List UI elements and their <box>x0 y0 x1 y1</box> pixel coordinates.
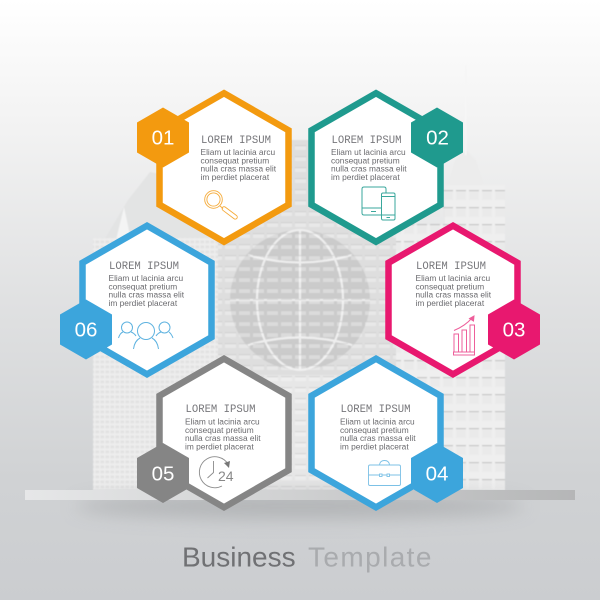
text 06: im perdiet placerat <box>108 298 178 308</box>
number 05: 05 <box>152 462 174 486</box>
heading 04: LOREM IPSUM <box>340 404 410 416</box>
number 01: 01 <box>152 126 174 150</box>
left spire <box>116 207 131 240</box>
icon: people <box>118 322 173 349</box>
hexagon 01 <box>160 93 288 242</box>
icon: briefcase <box>368 460 400 486</box>
number 03: 03 <box>503 318 525 342</box>
badge 02 <box>411 108 463 168</box>
city skyline <box>93 65 505 490</box>
icon: magnifier <box>205 191 238 220</box>
text 06: consequat pretium <box>108 281 177 291</box>
number 02: 02 <box>426 126 449 150</box>
text 02: consequat pretium <box>331 155 400 165</box>
icon: growth chart <box>454 316 474 355</box>
central tower windows <box>218 140 396 490</box>
text 05: Eliam ut lacinia arcu <box>185 416 260 426</box>
badge 04 <box>411 443 463 503</box>
text 01: Eliam ut lacinia arcu <box>200 147 276 157</box>
hexagon 06 <box>82 226 212 374</box>
globe <box>230 230 370 370</box>
title: Template <box>308 542 433 572</box>
text 04: im perdiet placerat <box>340 441 409 451</box>
platform <box>25 490 575 500</box>
text 03: Eliam ut lacinia arcu <box>416 273 491 283</box>
lower tower block <box>218 375 396 490</box>
text 05: nulla cras massa elit <box>185 433 261 443</box>
text 01: consequat pretium <box>200 155 269 165</box>
heading 06: LOREM IPSUM <box>109 261 179 273</box>
text 05: consequat pretium <box>185 425 254 435</box>
heading 05: LOREM IPSUM <box>186 404 255 416</box>
text 03: nulla cras massa elit <box>416 290 492 300</box>
badge 05 <box>137 443 189 503</box>
panel 04 <box>312 359 463 507</box>
icon: 24-hour clock <box>199 457 234 488</box>
number 06: 06 <box>75 318 97 342</box>
heading 03: LOREM IPSUM <box>416 261 486 273</box>
heading 02: LOREM IPSUM <box>332 135 401 147</box>
text 04: consequat pretium <box>340 425 409 435</box>
panel 02 <box>312 93 463 242</box>
badge 01 <box>137 108 189 168</box>
platform shadow <box>75 493 525 519</box>
text 05: im perdiet placerat <box>185 441 254 451</box>
badge 06 <box>60 300 112 360</box>
text 01: nulla cras massa elit <box>200 164 277 174</box>
hexagon 04 <box>312 359 440 507</box>
text 06: nulla cras massa elit <box>108 290 185 300</box>
icon: tablet and phone <box>362 187 395 220</box>
left roof silhouette <box>104 172 215 240</box>
hexagon 02 <box>312 93 440 242</box>
text 04: nulla cras massa elit <box>340 433 416 443</box>
hexagon 05 <box>160 359 288 507</box>
number 04: 04 <box>426 462 448 486</box>
text 01: im perdiet placerat <box>200 172 270 182</box>
text 03: consequat pretium <box>416 281 484 291</box>
left building <box>93 238 218 490</box>
badge 03 <box>488 300 540 360</box>
panel 03 <box>388 226 540 374</box>
text 03: im perdiet placerat <box>416 298 485 308</box>
icon: 24-hour clock: 24 <box>218 468 234 484</box>
right building <box>396 185 505 490</box>
text 02: Eliam ut lacinia arcu <box>331 147 406 157</box>
panel 01 <box>137 93 288 242</box>
text 04: Eliam ut lacinia arcu <box>340 416 415 426</box>
central tower <box>218 140 396 490</box>
text 02: im perdiet placerat <box>331 172 400 182</box>
panel 05 <box>137 359 288 507</box>
panel 06 <box>60 226 212 374</box>
right spire <box>465 65 467 155</box>
right crown <box>448 150 484 185</box>
heading 01: LOREM IPSUM <box>201 135 271 147</box>
text 06: Eliam ut lacinia arcu <box>108 273 184 283</box>
title: Business <box>182 542 296 572</box>
hexagon 03 <box>388 226 518 374</box>
text 02: nulla cras massa elit <box>331 164 407 174</box>
